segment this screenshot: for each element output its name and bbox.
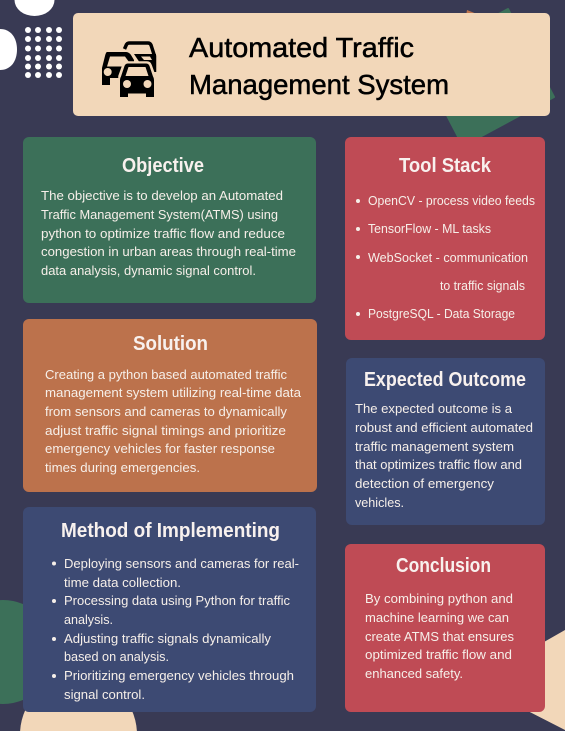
- text: solution body: adjust traffic signal timings and prioritize: [45, 424, 286, 438]
- title: Management System: [189, 69, 449, 100]
- list: tools: TensorFlow - ML tasks: [368, 222, 491, 236]
- text: solution body: management system utilizing real-time data: [45, 386, 301, 400]
- heading: tool stack: Tool Stack: [399, 155, 492, 177]
- list: implementation steps: time data collection.: [64, 576, 181, 590]
- text: expected outcome body: that optimizes traffic flow and: [355, 458, 522, 472]
- title: Automated Traffic: [189, 32, 414, 63]
- text: solution body: times during emergencies.: [45, 461, 200, 475]
- title: [189, 32, 449, 100]
- text: solution body: from sensors and cameras to dynamically: [45, 405, 288, 419]
- text: objective body: data analysis, dynamic signal control.: [41, 264, 256, 278]
- text: expected outcome body: traffic management system: [355, 440, 514, 454]
- list: tools: WebSocket - communication: [368, 251, 528, 265]
- heading: conclusion: Conclusion: [396, 555, 491, 577]
- panel: method of implementing: [23, 507, 316, 712]
- text: expected outcome body: robust and efficient automated: [355, 421, 533, 435]
- list: tools: PostgreSQL - Data Storage: [368, 307, 515, 321]
- text: conclusion body: enhanced safety.: [365, 667, 463, 681]
- list: implementation steps: Processing data using Python for traffic: [64, 594, 290, 608]
- text: objective body: congestion in urban areas through real-time: [41, 245, 296, 259]
- text: objective body: The objective is to develop an Automated: [41, 189, 283, 203]
- text: conclusion body: [365, 592, 514, 681]
- heading: solution: Solution: [133, 333, 208, 355]
- panel: solution: [23, 319, 317, 492]
- list: implementation steps: [52, 557, 299, 702]
- text: conclusion body: By combining python and: [365, 592, 513, 606]
- list: tools: to traffic signals: [440, 279, 525, 293]
- text: conclusion body: optimized traffic flow and: [365, 648, 512, 662]
- header panel: [73, 13, 550, 116]
- list: implementation steps: Adjusting traffic signals dynamically: [64, 632, 272, 646]
- text: solution body: emergency vehicles for faster response: [45, 442, 275, 456]
- text: objective body: python to optimize traffic flow and reduce: [41, 227, 285, 241]
- list: implementation steps: Prioritizing emergency vehicles through: [64, 669, 294, 683]
- text: conclusion body: create ATMS that ensures: [365, 630, 514, 644]
- list: implementation steps: Deploying sensors and cameras for real-: [64, 557, 299, 571]
- list: implementation steps: analysis.: [64, 613, 113, 627]
- heading: objective: Objective: [122, 155, 204, 177]
- heading: expected outcome: Expected Outcome: [364, 369, 526, 391]
- icon: traffic cars: [102, 43, 156, 98]
- list: implementation steps: based on analysis.: [64, 650, 169, 664]
- panel: objective: [23, 137, 316, 303]
- panel: tool stack: [345, 137, 545, 340]
- panel: expected outcome: [346, 358, 545, 525]
- text: objective body: Traffic Management System(ATMS) using: [41, 208, 278, 222]
- text: solution body: [45, 368, 301, 475]
- text: conclusion body: machine learning we can: [365, 611, 509, 625]
- panel: conclusion: [345, 544, 545, 712]
- list: tools: OpenCV - process video feeds: [368, 194, 535, 208]
- list: tools: [356, 194, 535, 321]
- text: expected outcome body: detection of emergency: [355, 477, 495, 491]
- text: objective body: [41, 189, 296, 278]
- list: implementation steps: signal control.: [64, 688, 145, 702]
- text: expected outcome body: [355, 402, 533, 510]
- text: solution body: Creating a python based automated traffic: [45, 368, 287, 382]
- heading: method of implementing: Method of Implementing: [61, 520, 280, 542]
- text: expected outcome body: vehicles.: [355, 496, 404, 510]
- text: expected outcome body: The expected outcome is a: [355, 402, 512, 416]
